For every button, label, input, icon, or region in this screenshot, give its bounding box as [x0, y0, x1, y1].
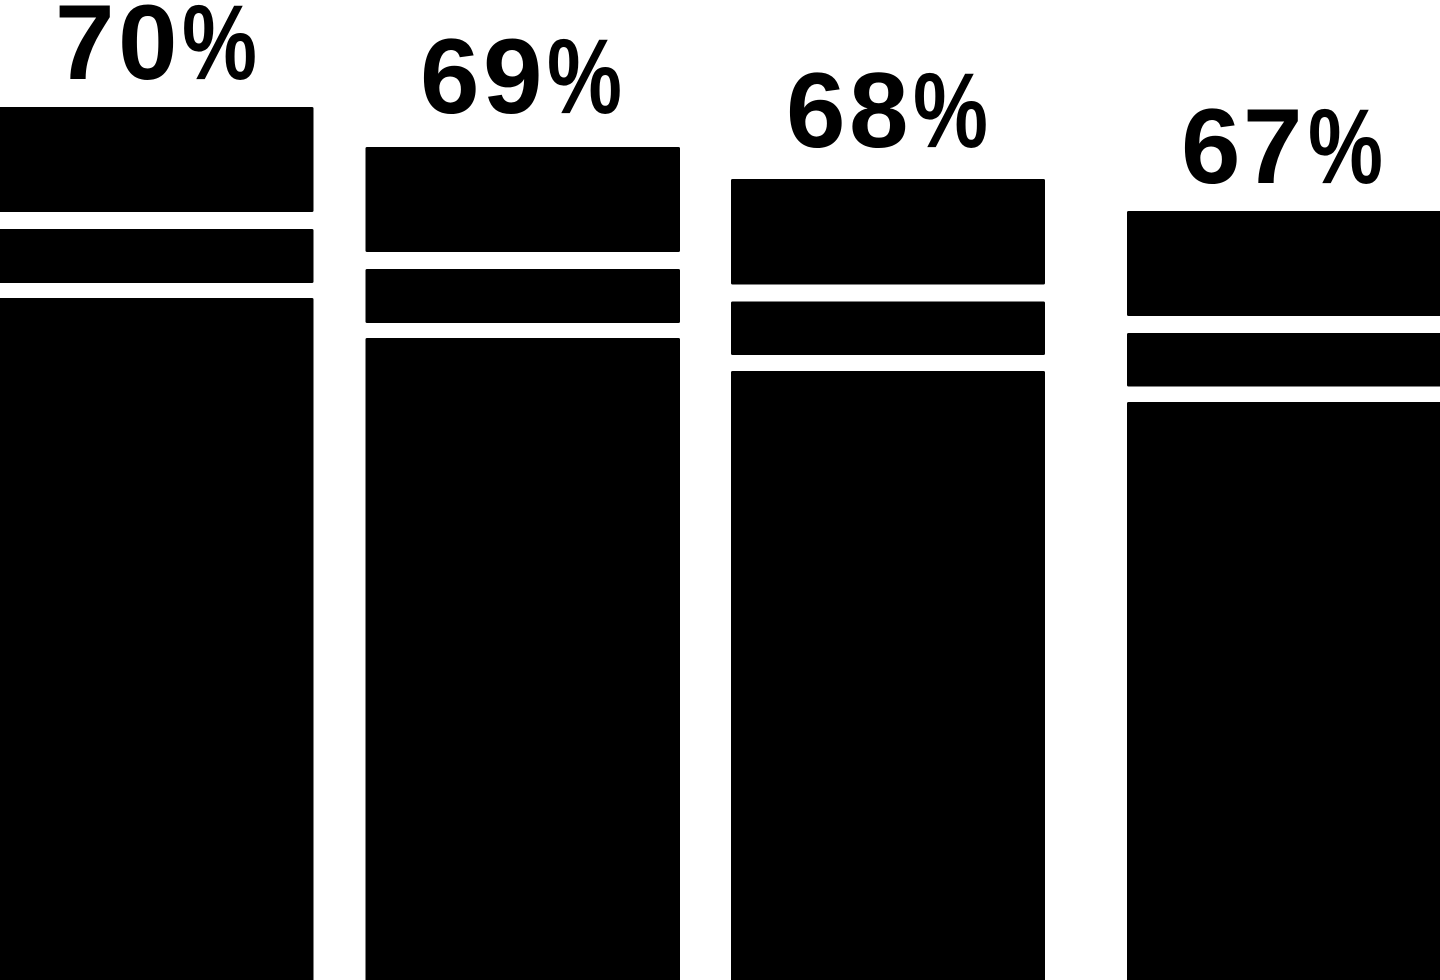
segment: top — [366, 147, 680, 252]
bar group: 67% — [1127, 86, 1440, 980]
label: 67%: % — [1308, 86, 1383, 206]
segment: top — [0, 107, 314, 212]
label: 67%: 7 — [1243, 86, 1303, 206]
segment: middle — [0, 229, 314, 283]
segment: bottom — [366, 338, 680, 980]
bar group: 69% — [366, 16, 680, 980]
segment: bottom — [731, 371, 1045, 980]
segment: middle — [366, 269, 680, 323]
label: 68%: % — [913, 50, 988, 170]
bar group: 70% — [0, 0, 314, 980]
label: 67%: 6 — [1181, 86, 1241, 206]
label: 69%: 9 — [483, 16, 543, 136]
segment: top — [1127, 211, 1440, 316]
label: 68%: 6 — [786, 50, 846, 170]
segment: middle — [731, 302, 1045, 355]
label: 68%: 8 — [849, 50, 909, 170]
label: 69%: 6 — [420, 16, 480, 136]
bar group: 68% — [731, 50, 1045, 980]
segment: bottom — [1127, 402, 1440, 980]
segment: bottom — [0, 298, 314, 980]
segment: top — [731, 179, 1045, 284]
label: 69%: % — [547, 16, 622, 136]
segment: middle — [1127, 333, 1440, 386]
